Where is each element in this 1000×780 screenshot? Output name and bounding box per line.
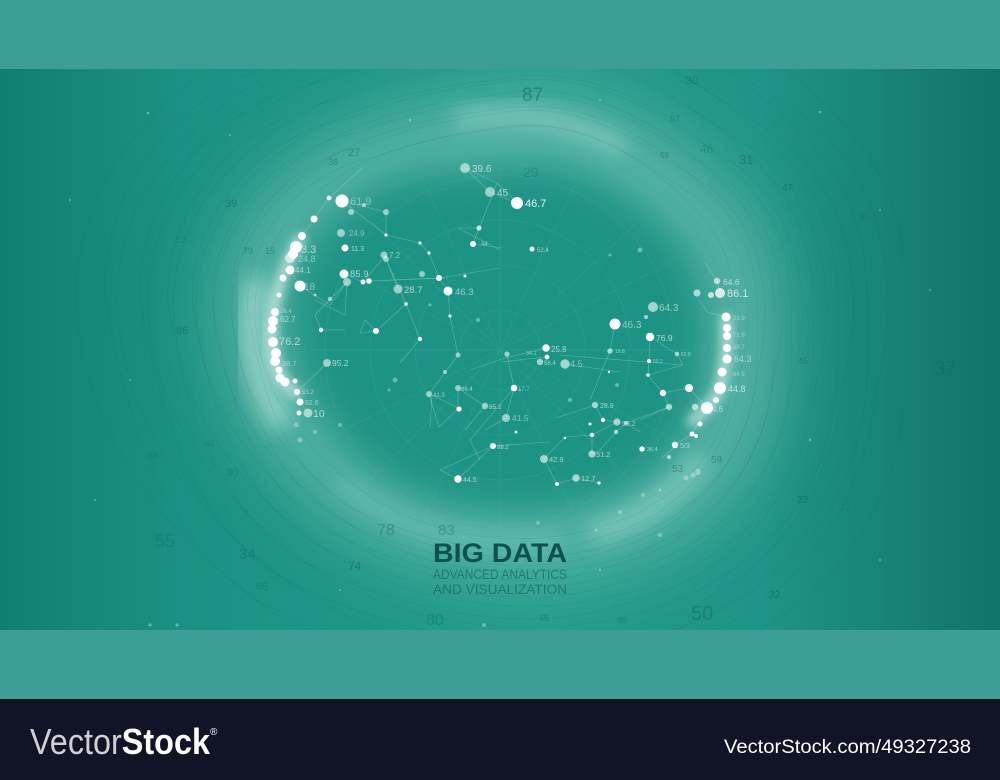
node value labels: 41.3 xyxy=(433,393,445,399)
node value labels: 25.8 xyxy=(551,345,567,354)
node value labels: 17.7 xyxy=(518,387,530,393)
node value labels: 10 xyxy=(313,408,325,420)
background numbers: 32 xyxy=(769,590,781,601)
node value labels: 51.2 xyxy=(596,450,611,459)
node value labels: 24.8 xyxy=(298,254,316,264)
background numbers: 59 xyxy=(660,151,669,160)
node value labels: 64.5 xyxy=(733,372,745,378)
background numbers: 83 xyxy=(438,522,455,539)
top band xyxy=(0,0,1000,69)
background numbers: 31 xyxy=(739,152,753,167)
node value labels: 12.7 xyxy=(581,474,596,483)
node value labels: 85.2 xyxy=(489,404,502,411)
background numbers: 46 xyxy=(205,439,215,449)
background numbers: 68 xyxy=(148,450,158,460)
background numbers: 86 xyxy=(176,325,188,337)
node value labels: 4.6 xyxy=(712,405,724,414)
node value labels: 3.3 xyxy=(301,244,316,256)
node value labels: 86.4 xyxy=(461,387,473,393)
node value labels: 19.8 xyxy=(615,349,625,355)
background numbers: 65 xyxy=(256,581,268,593)
node value labels: 50.2 xyxy=(653,359,663,365)
node value labels: 42.9 xyxy=(549,455,564,464)
node value labels: 18 xyxy=(304,282,316,293)
subtitle xyxy=(433,570,566,594)
node value labels: 85.9 xyxy=(350,269,368,280)
node value labels: 36.4 xyxy=(647,447,658,453)
speckle dots xyxy=(69,99,931,627)
title: Big Data: BIG DATA xyxy=(433,538,567,568)
footer logo: VectorStock xyxy=(30,721,211,762)
background numbers: 15 xyxy=(265,246,275,256)
contour lines xyxy=(196,69,794,630)
background numbers: 89 xyxy=(618,616,627,625)
background numbers: 27 xyxy=(348,147,360,159)
node value labels: 38.7 xyxy=(282,359,297,368)
data nodes right cluster xyxy=(537,278,720,486)
title: Big Data xyxy=(433,543,566,594)
background numbers: 80 xyxy=(426,612,444,629)
node value labels: 72.6 xyxy=(733,333,745,339)
data nodes left cluster xyxy=(294,163,534,483)
node value labels: 41.5 xyxy=(512,413,529,423)
node value labels: 62.6 xyxy=(305,400,319,407)
node value labels xyxy=(279,164,752,484)
node value labels: 62.7 xyxy=(280,315,296,324)
background numbers: 72 xyxy=(840,502,850,512)
background numbers xyxy=(148,75,956,629)
node value labels: 46.7 xyxy=(525,198,546,210)
node value labels: 45 xyxy=(497,188,509,199)
background numbers: 32 xyxy=(797,495,809,506)
footer logo: ® xyxy=(210,727,218,738)
node value labels: 86.1 xyxy=(727,288,748,300)
node value labels: 34.1 xyxy=(526,351,537,357)
background numbers: 74 xyxy=(348,559,362,573)
node value labels: 64.3 xyxy=(659,303,679,314)
background numbers: 52 xyxy=(175,235,187,246)
node value labels: 44 xyxy=(481,242,488,248)
background numbers: 46 xyxy=(700,142,714,156)
node value labels: 53.2 xyxy=(302,390,314,396)
background numbers: 45 xyxy=(798,356,808,366)
background numbers: 37 xyxy=(934,358,956,380)
node value labels: 39.6 xyxy=(472,164,492,175)
background numbers: 79 xyxy=(243,246,253,256)
main teal panel xyxy=(0,69,1000,630)
node value labels: 64.3 xyxy=(734,354,752,364)
node value labels: 46.3 xyxy=(455,287,474,298)
background numbers: 53 xyxy=(672,464,684,475)
background numbers: 29 xyxy=(523,164,539,180)
footer bar xyxy=(0,699,1000,780)
background numbers: 36 xyxy=(328,157,338,167)
node value labels: 26.4 xyxy=(280,309,292,315)
inner disc xyxy=(288,162,708,515)
node value labels: 24.9 xyxy=(349,229,365,238)
glowing arc right xyxy=(690,288,732,438)
node value labels: 11.3 xyxy=(351,246,364,253)
node value labels: 33.9 xyxy=(733,316,745,322)
node value labels: 52.4 xyxy=(537,248,549,254)
node value labels: 88.2 xyxy=(497,445,509,451)
background numbers: 57 xyxy=(670,114,680,124)
node value labels: 46.3 xyxy=(622,320,642,331)
node value labels: 7.2 xyxy=(389,251,401,260)
node value labels: 28.9 xyxy=(600,403,614,410)
glow halo ring xyxy=(218,94,780,577)
background numbers: 59 xyxy=(711,455,723,466)
background numbers: 87 xyxy=(522,85,543,106)
node value labels: 76.2 xyxy=(279,336,300,348)
radial web xyxy=(310,170,690,530)
background numbers: 47 xyxy=(782,183,794,194)
background numbers: 46 xyxy=(539,613,549,623)
node value labels: 76.9 xyxy=(656,333,673,343)
background numbers: 78 xyxy=(377,522,395,539)
node value labels: 64.6 xyxy=(723,277,740,287)
node value labels: 5/3 xyxy=(680,443,690,450)
node value labels: 28.7 xyxy=(404,285,422,296)
glowing arc left xyxy=(268,216,318,395)
background numbers: 39 xyxy=(225,198,237,210)
footer image id: VectorStock.com/49327238 xyxy=(724,737,971,758)
node value labels: 44.1 xyxy=(295,266,311,275)
bottom band xyxy=(0,630,1000,699)
background numbers: 55 xyxy=(155,531,175,551)
subtitle: ADVANCED ANALYTICS xyxy=(433,567,567,582)
background numbers: 30 xyxy=(226,467,238,479)
background numbers: 50 xyxy=(691,603,713,625)
subtitle: AND VISUALIZATION xyxy=(433,582,567,597)
background numbers: 85 xyxy=(860,212,870,222)
node value labels: 38.7 xyxy=(733,345,745,351)
node value labels: 4.5 xyxy=(570,359,583,369)
node value labels: 44.8 xyxy=(728,384,746,394)
background numbers: 34 xyxy=(239,546,256,563)
node value labels: 95.2 xyxy=(332,358,349,368)
node value labels: 61.9 xyxy=(350,196,371,208)
background numbers: 30 xyxy=(686,75,698,87)
node value labels: 58.4 xyxy=(544,361,556,367)
network links xyxy=(290,168,726,484)
node value labels: 44.5 xyxy=(463,477,477,484)
node value labels: 62.8 xyxy=(681,352,691,358)
node value labels: 59.2 xyxy=(622,421,636,428)
